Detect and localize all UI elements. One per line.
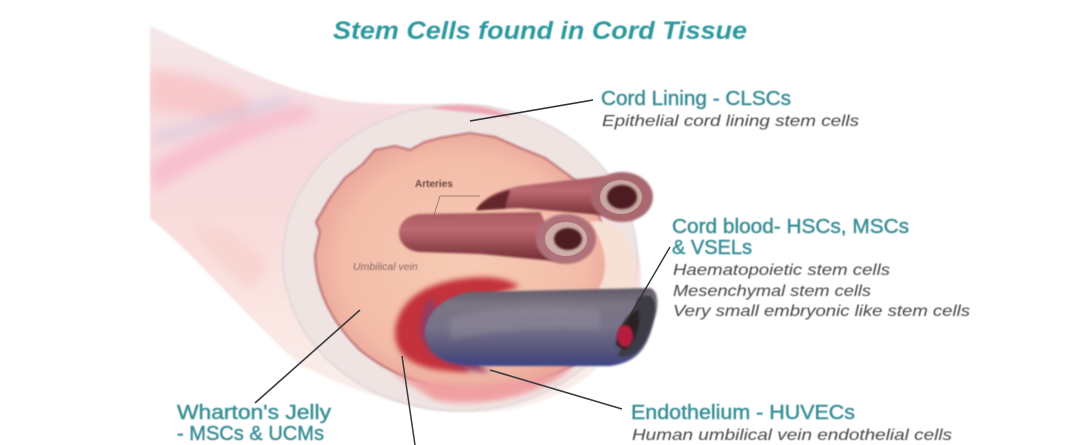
label: Umbilical vein: Umbilical vein bbox=[353, 261, 418, 273]
vein cavity bbox=[395, 277, 520, 372]
callout: endothelium bbox=[631, 402, 952, 444]
callout: cord lining: Cord Lining - CLSCs bbox=[601, 88, 791, 110]
illustration: umbilical cord cross-section bbox=[150, 26, 657, 412]
callout: cord lining bbox=[601, 88, 859, 130]
callout: cord blood bbox=[672, 216, 970, 320]
callout: cord lining: Epithelial cord lining stem cells bbox=[602, 113, 859, 130]
leader: cord blood bbox=[625, 247, 670, 324]
callout: Wharton's jelly: Wharton's Jelly bbox=[177, 402, 331, 424]
leader: bottom bbox=[402, 356, 415, 445]
artery: rear bbox=[476, 172, 653, 222]
label: Arteries bbox=[415, 179, 480, 215]
cord lining ring bbox=[283, 105, 637, 411]
title: Stem Cells found in Cord Tissue bbox=[333, 17, 747, 45]
callout: Wharton's jelly bbox=[177, 402, 331, 445]
callout: endothelium: Endothelium - HUVECs bbox=[631, 402, 855, 424]
right pale tissue bbox=[590, 221, 637, 292]
cord surface streaks bbox=[150, 70, 318, 290]
callout: endothelium: Human umbilical vein endothelial cells bbox=[632, 427, 952, 444]
callout: cord blood: Cord blood- HSCs, MSCs bbox=[672, 216, 909, 238]
leader: Wharton's jelly bbox=[255, 310, 360, 403]
leader: cord lining bbox=[470, 100, 593, 121]
artery: front bbox=[399, 212, 596, 264]
Wharton's jelly bbox=[315, 133, 611, 391]
callout: cord blood: Very small embryonic like stem cells bbox=[673, 303, 970, 320]
cord outer sheath bbox=[150, 26, 641, 412]
umbilical vein tube bbox=[425, 288, 657, 366]
lower tissue band bbox=[390, 365, 575, 403]
callout: Wharton's jelly: - MSCs & UCMs bbox=[177, 423, 324, 445]
callout: cord blood: Haematopoietic stem cells bbox=[673, 262, 890, 279]
cord lining pink rim bbox=[430, 105, 512, 118]
label: Arteries: Arteries bbox=[415, 179, 453, 190]
callout: cord blood: Mesenchymal stem cells bbox=[673, 283, 871, 300]
callout: cord blood: & VSELs bbox=[672, 237, 752, 259]
leader: endothelium bbox=[490, 370, 622, 409]
